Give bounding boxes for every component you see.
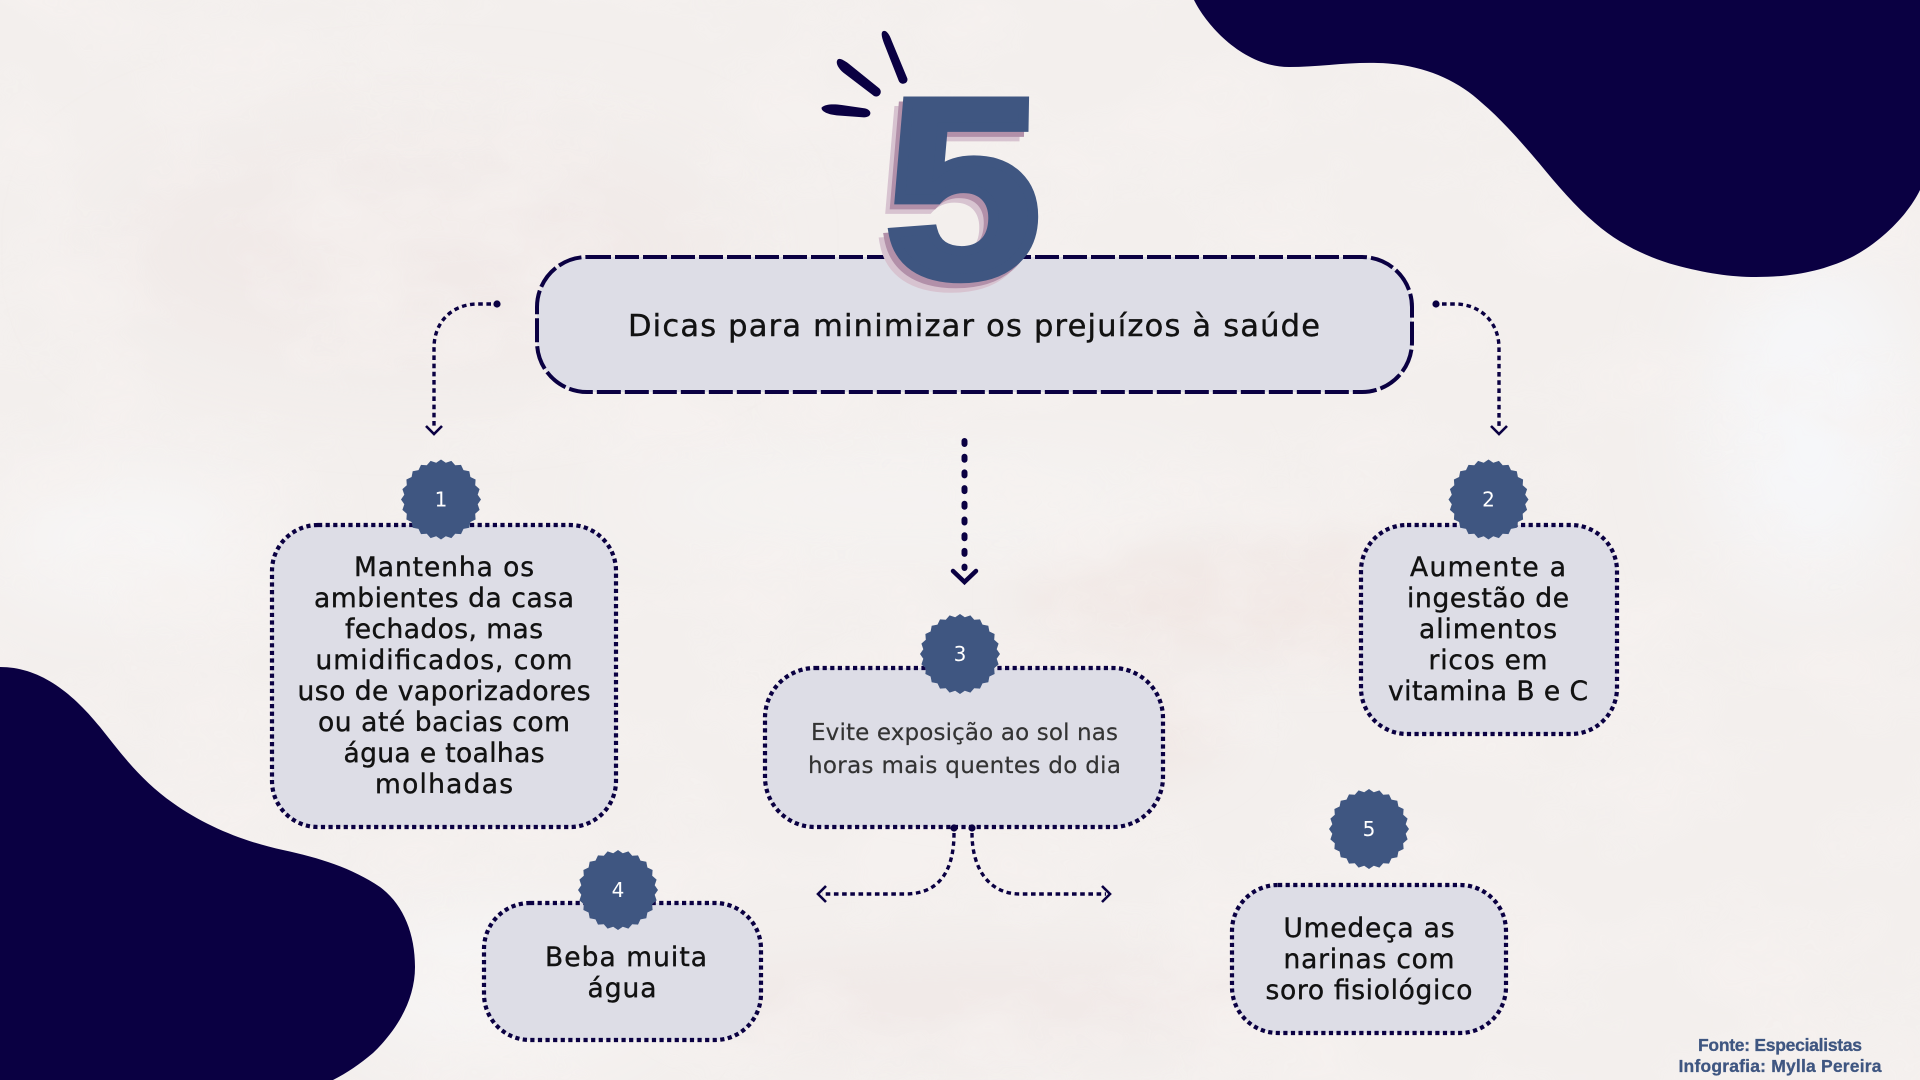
big number 5: 5 — [879, 51, 1039, 335]
tip 1 text: ambientes da casa — [314, 583, 574, 614]
tip 1 text: molhadas — [375, 769, 513, 800]
tip 2 text: Aumente a — [1410, 552, 1566, 583]
tip 2 text: ingestão de — [1407, 583, 1569, 614]
arrow: heading to tip 1 — [426, 300, 501, 434]
tip 4 text: Beba muita — [545, 942, 707, 973]
tip 1 text: fechados, mas — [345, 614, 543, 645]
arrow: heading to tip 2 — [1432, 300, 1507, 434]
badge: 5 — [1329, 789, 1409, 869]
tip 5 text: soro fisiológico — [1266, 975, 1472, 1006]
badge: 2: 2 — [1482, 488, 1495, 512]
tip 4 text: água — [588, 973, 656, 1004]
tip 1 text: água e toalhas — [344, 738, 544, 769]
badge: 4: 4 — [612, 878, 624, 902]
source credits: Fonte: Especialistas — [1698, 1035, 1862, 1055]
tip 2 text — [1388, 552, 1588, 707]
tip 5 text: Umedeça as — [1284, 913, 1454, 944]
tip 2 text: ricos em — [1428, 645, 1548, 676]
badge: 1 — [401, 460, 481, 540]
tip 4 text — [545, 942, 707, 1004]
badge: 3: 3 — [954, 642, 966, 666]
big number 5: 5 — [883, 46, 1044, 330]
tip 2 text: alimentos — [1419, 614, 1557, 645]
tip 1 text: uso de vaporizadores — [298, 676, 590, 707]
decorative blob: top right — [1194, 0, 1920, 277]
tip 1 text: ou até bacias com — [318, 707, 570, 738]
icon: sparkle strokes — [822, 31, 907, 117]
panel: tip 4 — [484, 903, 761, 1040]
arrows: tip 3 branching left and right — [818, 824, 1110, 902]
badge: 1: 1 — [435, 488, 447, 512]
panel: tip 3 — [765, 668, 1163, 827]
badge: 2 — [1448, 460, 1528, 540]
tip 3 text — [808, 720, 1121, 779]
decorative blob: bottom left — [0, 667, 415, 1080]
badge: 4 — [578, 850, 658, 930]
heading text: Dicas para minimizar os prejuízos à saúde — [628, 309, 1320, 344]
source credits: Infografia: Mylla Pereira — [1678, 1056, 1882, 1076]
tip 2 text: vitamina B e C — [1388, 676, 1588, 707]
tip 1 text — [298, 552, 590, 800]
tip 3 text: Evite exposição ao sol nas — [811, 720, 1118, 746]
tip 5 text — [1266, 913, 1472, 1006]
panel: tip 2 — [1361, 525, 1617, 734]
source credits — [1678, 1035, 1882, 1076]
tip 5 text: narinas com — [1284, 944, 1454, 975]
tip 1 text: umidificados, com — [316, 645, 572, 676]
panel: tip 5 — [1232, 885, 1506, 1033]
badge: 5: 5 — [1363, 817, 1375, 841]
arrow: heading to tip 3 — [953, 441, 976, 582]
tip 3 text: horas mais quentes do dia — [808, 753, 1121, 779]
big number 5: 5 — [874, 55, 1035, 340]
tip 1 text: Mantenha os — [354, 552, 534, 583]
badge: 3 — [920, 614, 1000, 694]
panel: main heading box — [537, 257, 1412, 392]
panel: tip 1 — [272, 525, 616, 827]
